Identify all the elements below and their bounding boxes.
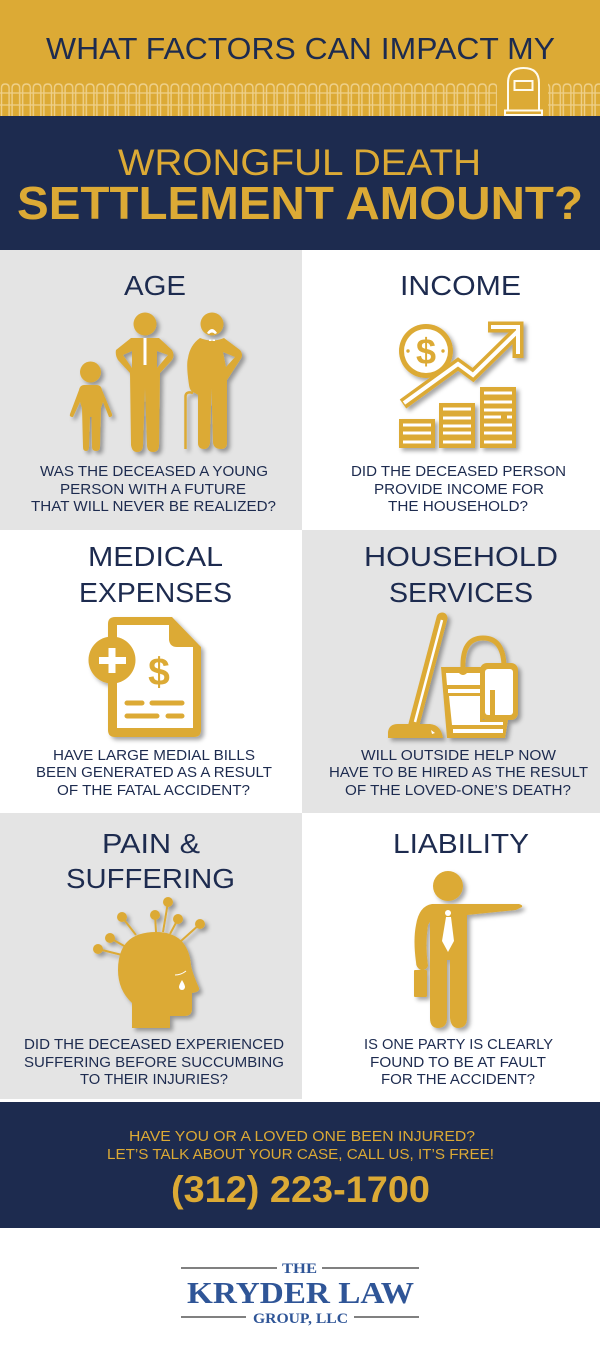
question: income: DID THE DECEASED PERSON (351, 463, 566, 480)
logo: the kryder law group: THE (282, 1261, 317, 1277)
question: medical: HAVE LARGE MEDIAL BILLS (53, 747, 255, 764)
question: liability: FOR THE ACCIDENT? (381, 1071, 535, 1088)
question: liability (364, 1036, 553, 1088)
icon: medical bill (88, 617, 201, 737)
heading: what factors: WHAT FACTORS CAN IMPACT MY (46, 31, 555, 66)
heading: income: INCOME (400, 270, 521, 301)
panel: household services (302, 530, 600, 813)
heading: household services (364, 541, 558, 608)
icon: rising income (399, 324, 518, 448)
panel: liability (302, 813, 600, 1099)
question: age: THAT WILL NEVER BE REALIZED? (31, 498, 276, 515)
question: pain (24, 1036, 284, 1088)
heading: pain and suffering: SUFFERING (66, 863, 235, 894)
question: income: PROVIDE INCOME FOR (374, 481, 544, 498)
heading: age: AGE (124, 270, 186, 301)
call to action text: LET’S TALK ABOUT YOUR CASE, CALL US, IT’S FREE! (107, 1146, 494, 1163)
question: household (329, 747, 588, 799)
panel: income (302, 250, 600, 530)
logo: the kryder law group: GROUP, LLC (253, 1311, 348, 1327)
heading: medical expenses: EXPENSES (79, 577, 232, 608)
icon: rising income: $ (416, 331, 436, 372)
phone number: (312) 223-1700 (171, 1169, 430, 1210)
heading: pain and suffering: PAIN & (102, 828, 200, 859)
question: medical: OF THE FATAL ACCIDENT? (57, 782, 250, 799)
question: age (31, 463, 276, 515)
question: age: PERSON WITH A FUTURE (60, 481, 246, 498)
fence pattern (0, 83, 600, 116)
icon: three generations (70, 312, 242, 452)
header: gold band (0, 0, 600, 116)
call to action band (0, 1102, 600, 1228)
title band (0, 116, 600, 250)
panel: age (0, 250, 302, 530)
question: income (351, 463, 566, 515)
question: income: THE HOUSEHOLD? (388, 498, 528, 515)
question: pain: TO THEIR INJURIES? (80, 1071, 228, 1088)
icon: gravestone (505, 68, 542, 115)
heading: liability: LIABILITY (393, 828, 529, 859)
question: household: OF THE LOVED-ONE’S DEATH? (345, 782, 571, 799)
question: household: WILL OUTSIDE HELP NOW (361, 747, 557, 764)
heading: household services: SERVICES (389, 577, 533, 608)
question: pain: SUFFERING BEFORE SUCCUMBING (24, 1054, 284, 1071)
question: medical (36, 747, 272, 799)
icon: pointing man (414, 871, 522, 1028)
question: liability: IS ONE PARTY IS CLEARLY (364, 1036, 553, 1053)
question: household: HAVE TO BE HIRED AS THE RESULT (329, 764, 588, 781)
panel: pain and suffering (0, 813, 302, 1099)
question: age: WAS THE DECEASED A YOUNG (40, 463, 268, 480)
heading: medical expenses: MEDICAL (88, 541, 223, 572)
question: medical: BEEN GENERATED AS A RESULT (36, 764, 272, 781)
heading: household services: HOUSEHOLD (364, 541, 558, 572)
logo: the kryder law group (181, 1261, 419, 1327)
logo: the kryder law group: KRYDER LAW (187, 1275, 414, 1310)
panel: medical expenses (0, 530, 302, 813)
heading: pain and suffering (66, 828, 235, 894)
question: liability: FOUND TO BE AT FAULT (370, 1054, 546, 1071)
icon: medical bill: $ (148, 651, 170, 694)
heading: medical expenses (79, 541, 232, 608)
question: pain: DID THE DECEASED EXPERIENCED (24, 1036, 284, 1053)
title line: wrongful death: WRONGFUL DEATH (118, 142, 481, 183)
call to action text: HAVE YOU OR A LOVED ONE BEEN INJURED? (129, 1128, 475, 1145)
call to action text (107, 1128, 494, 1163)
icon: mop and bucket (388, 618, 518, 738)
title line: settlement amount: SETTLEMENT AMOUNT? (17, 177, 583, 229)
icon: head in pain (93, 897, 205, 1028)
